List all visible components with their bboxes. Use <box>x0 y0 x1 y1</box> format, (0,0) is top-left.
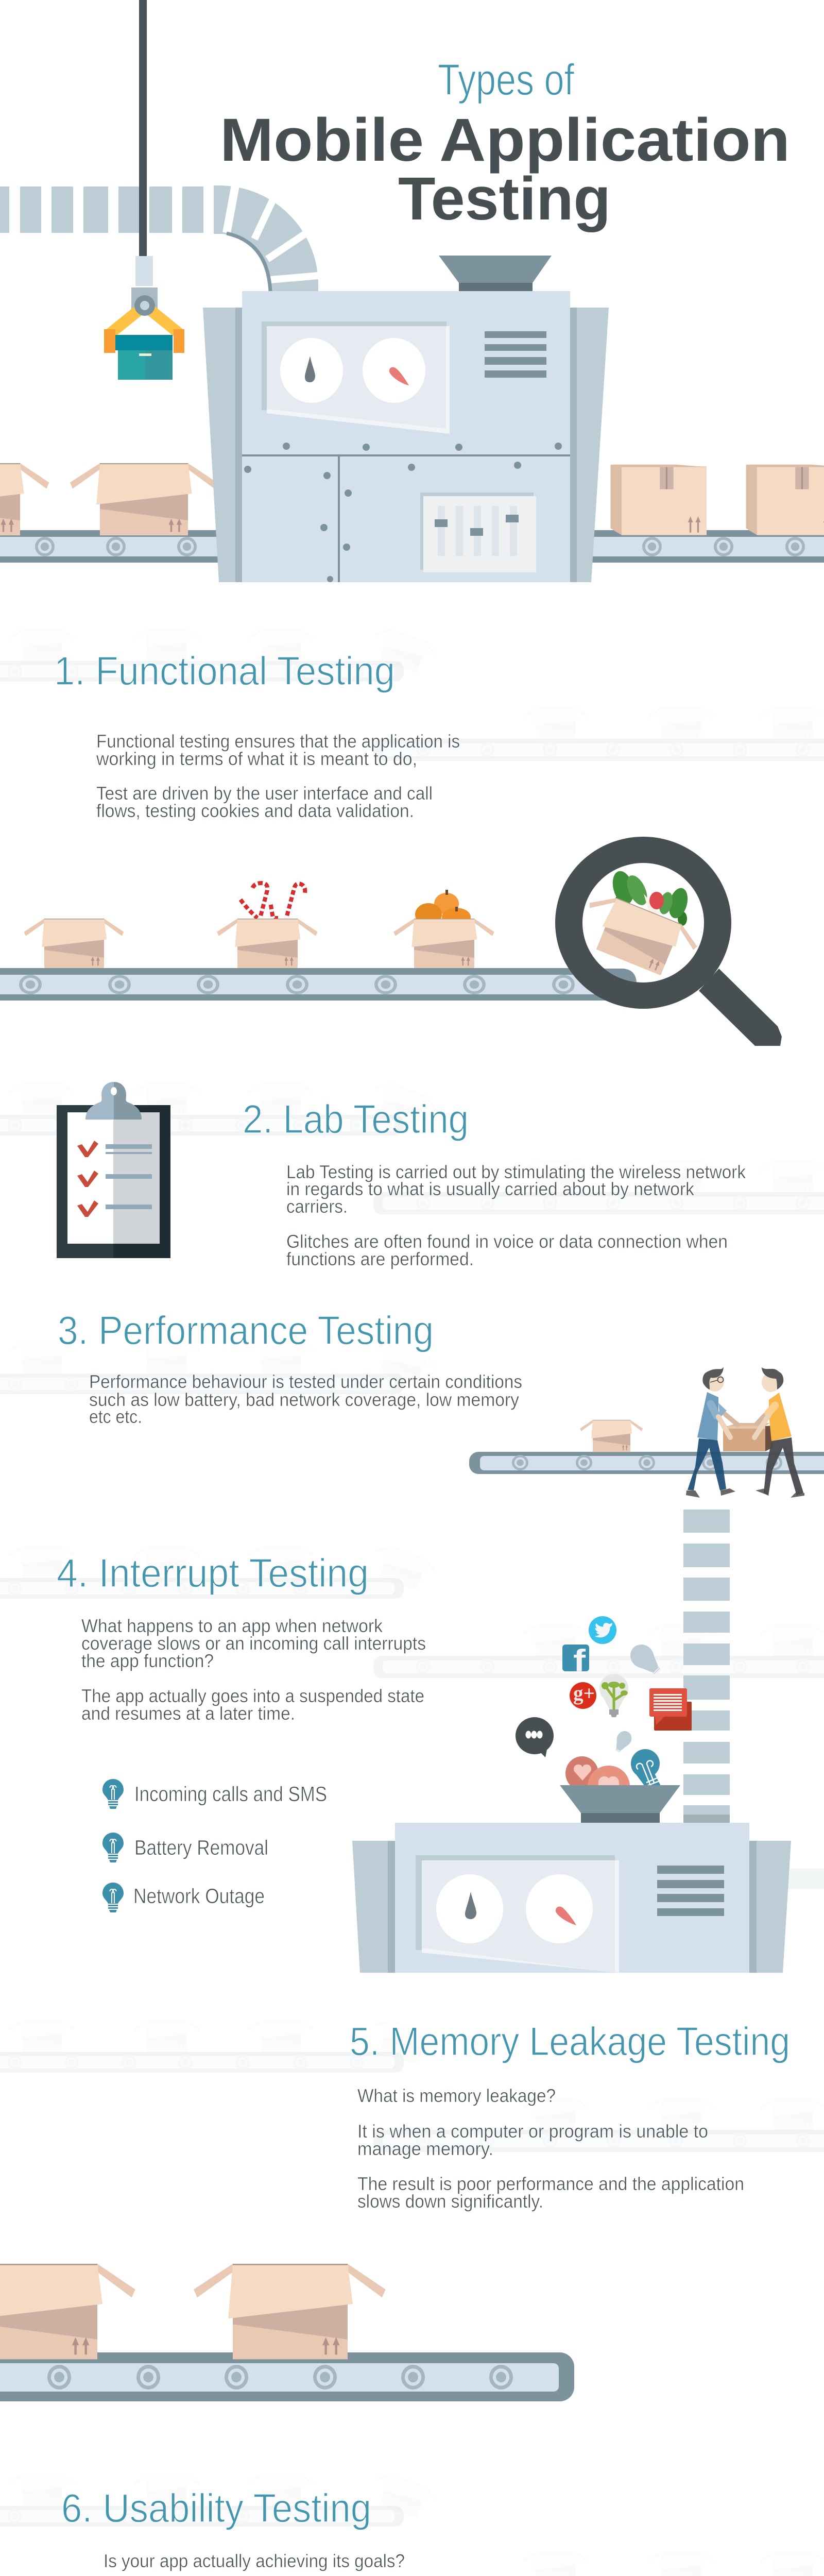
heading: lab testing: 2. Lab Testing <box>243 1096 469 1142</box>
text: performance testing: etc etc. <box>89 1406 142 1427</box>
text: usability testing: Is your app actually achieving its goals? <box>104 2550 405 2571</box>
text: lab testing: Lab Testing is carried out by stimulating the wireless network <box>286 1161 746 1182</box>
icon: teal box <box>115 335 173 380</box>
text: interrupt testing: the app function? <box>81 1650 214 1671</box>
icons: pink bulbs and teal bulb <box>565 1749 660 1785</box>
text: interrupt testing: The app actually goes into a suspended state <box>81 1685 424 1706</box>
icon: facebook <box>562 1643 589 1678</box>
heading: performance testing: 3. Performance Testing <box>58 1308 434 1353</box>
crane claw <box>104 0 184 380</box>
icon: google plus: g+ <box>573 1682 595 1705</box>
open boxes: functional <box>24 919 494 968</box>
text: memory leakage: It is when a computer or program is unable to <box>357 2121 708 2142</box>
icon: facebook: f <box>573 1643 586 1678</box>
rivets <box>244 443 562 582</box>
slider panel <box>420 493 536 572</box>
icon: dark chat <box>516 1717 554 1757</box>
vent lines <box>485 331 546 378</box>
conveyor: functional <box>0 968 637 1001</box>
magnifying glass <box>555 837 782 1046</box>
hose <box>0 185 324 294</box>
hero open boxes <box>0 463 217 535</box>
text: lab testing: Glitches are often found in voice or data connection when <box>286 1231 728 1252</box>
icon: small bulb <box>611 1728 634 1755</box>
text: performance testing: Performance behaviour is tested under certain conditions <box>89 1371 522 1392</box>
text: lab testing: carriers. <box>286 1196 348 1217</box>
pumpkins <box>415 890 471 926</box>
text: functional testing <box>96 731 460 821</box>
text: memory leakage: slows down significantly. <box>357 2191 543 2212</box>
icon: tree bulb <box>599 1674 628 1717</box>
text: lab testing: functions are performed. <box>286 1248 474 1269</box>
tall hose <box>683 1510 730 1823</box>
text: functional testing: Functional testing ensures that the application is <box>96 731 460 752</box>
candy canes <box>239 883 305 918</box>
text: functional testing: working in terms of what it is meant to do, <box>96 748 417 769</box>
title <box>220 56 790 233</box>
text: interrupt testing: and resumes at a later time. <box>81 1703 295 1724</box>
title: Testing <box>398 165 611 233</box>
text: lab testing <box>286 1161 746 1269</box>
conveyor: memory leakage <box>0 2352 574 2401</box>
text: memory leakage: manage memory. <box>357 2138 493 2159</box>
worker in yellow <box>754 1367 804 1498</box>
bullet list: interrupts: Battery Removal <box>134 1836 268 1859</box>
hero closed boxes <box>611 465 824 535</box>
heading: usability testing: 6. Usability Testing <box>61 2485 371 2531</box>
heading: interrupt testing: 4. Interrupt Testing <box>57 1550 369 1596</box>
icon: google plus <box>570 1682 596 1709</box>
text: lab testing: in regards to what is usually carried about by network <box>286 1178 695 1199</box>
text: memory leakage: What is memory leakage? <box>357 2085 556 2106</box>
gauge panel <box>262 321 450 434</box>
icon: grey bulb <box>625 1639 666 1680</box>
hero conveyor belt <box>0 530 824 563</box>
text: memory leakage: The result is poor performance and the application <box>357 2173 744 2194</box>
text: performance testing <box>89 1371 522 1427</box>
title: Types of <box>438 56 574 105</box>
hero machine <box>203 256 609 582</box>
text: interrupt testing: coverage slows or an incoming call interrupts <box>81 1633 426 1654</box>
bullet list: interrupts: Incoming calls and SMS <box>134 1782 327 1806</box>
carried box <box>723 1423 772 1451</box>
conveyor: performance <box>469 1452 824 1474</box>
bullet list: interrupts <box>102 1779 327 1912</box>
worker in blue <box>686 1367 737 1498</box>
faded background conveyors <box>0 624 824 2576</box>
open boxes: memory leakage <box>0 2264 386 2359</box>
text: interrupt testing: What happens to an app when network <box>81 1615 383 1636</box>
text: interrupt testing <box>81 1615 426 1724</box>
text: performance testing: such as low battery, bad network coverage, low memory <box>89 1389 519 1410</box>
two workers with box <box>686 1367 804 1498</box>
text: memory leakage <box>357 2085 744 2212</box>
open box: performance <box>580 1420 643 1452</box>
heading: functional testing: 1. Functional Testing <box>54 648 395 693</box>
second machine <box>352 1785 791 1973</box>
icon: red chat <box>649 1688 692 1731</box>
text: functional testing: flows, testing cookies and data validation. <box>96 800 414 821</box>
clipboard icon <box>57 1082 170 1258</box>
icon: twitter <box>589 1616 616 1644</box>
text: functional testing: Test are driven by the user interface and call <box>96 783 433 804</box>
title: Mobile Application <box>220 106 790 174</box>
bullet list: interrupts: Network Outage <box>133 1884 265 1908</box>
